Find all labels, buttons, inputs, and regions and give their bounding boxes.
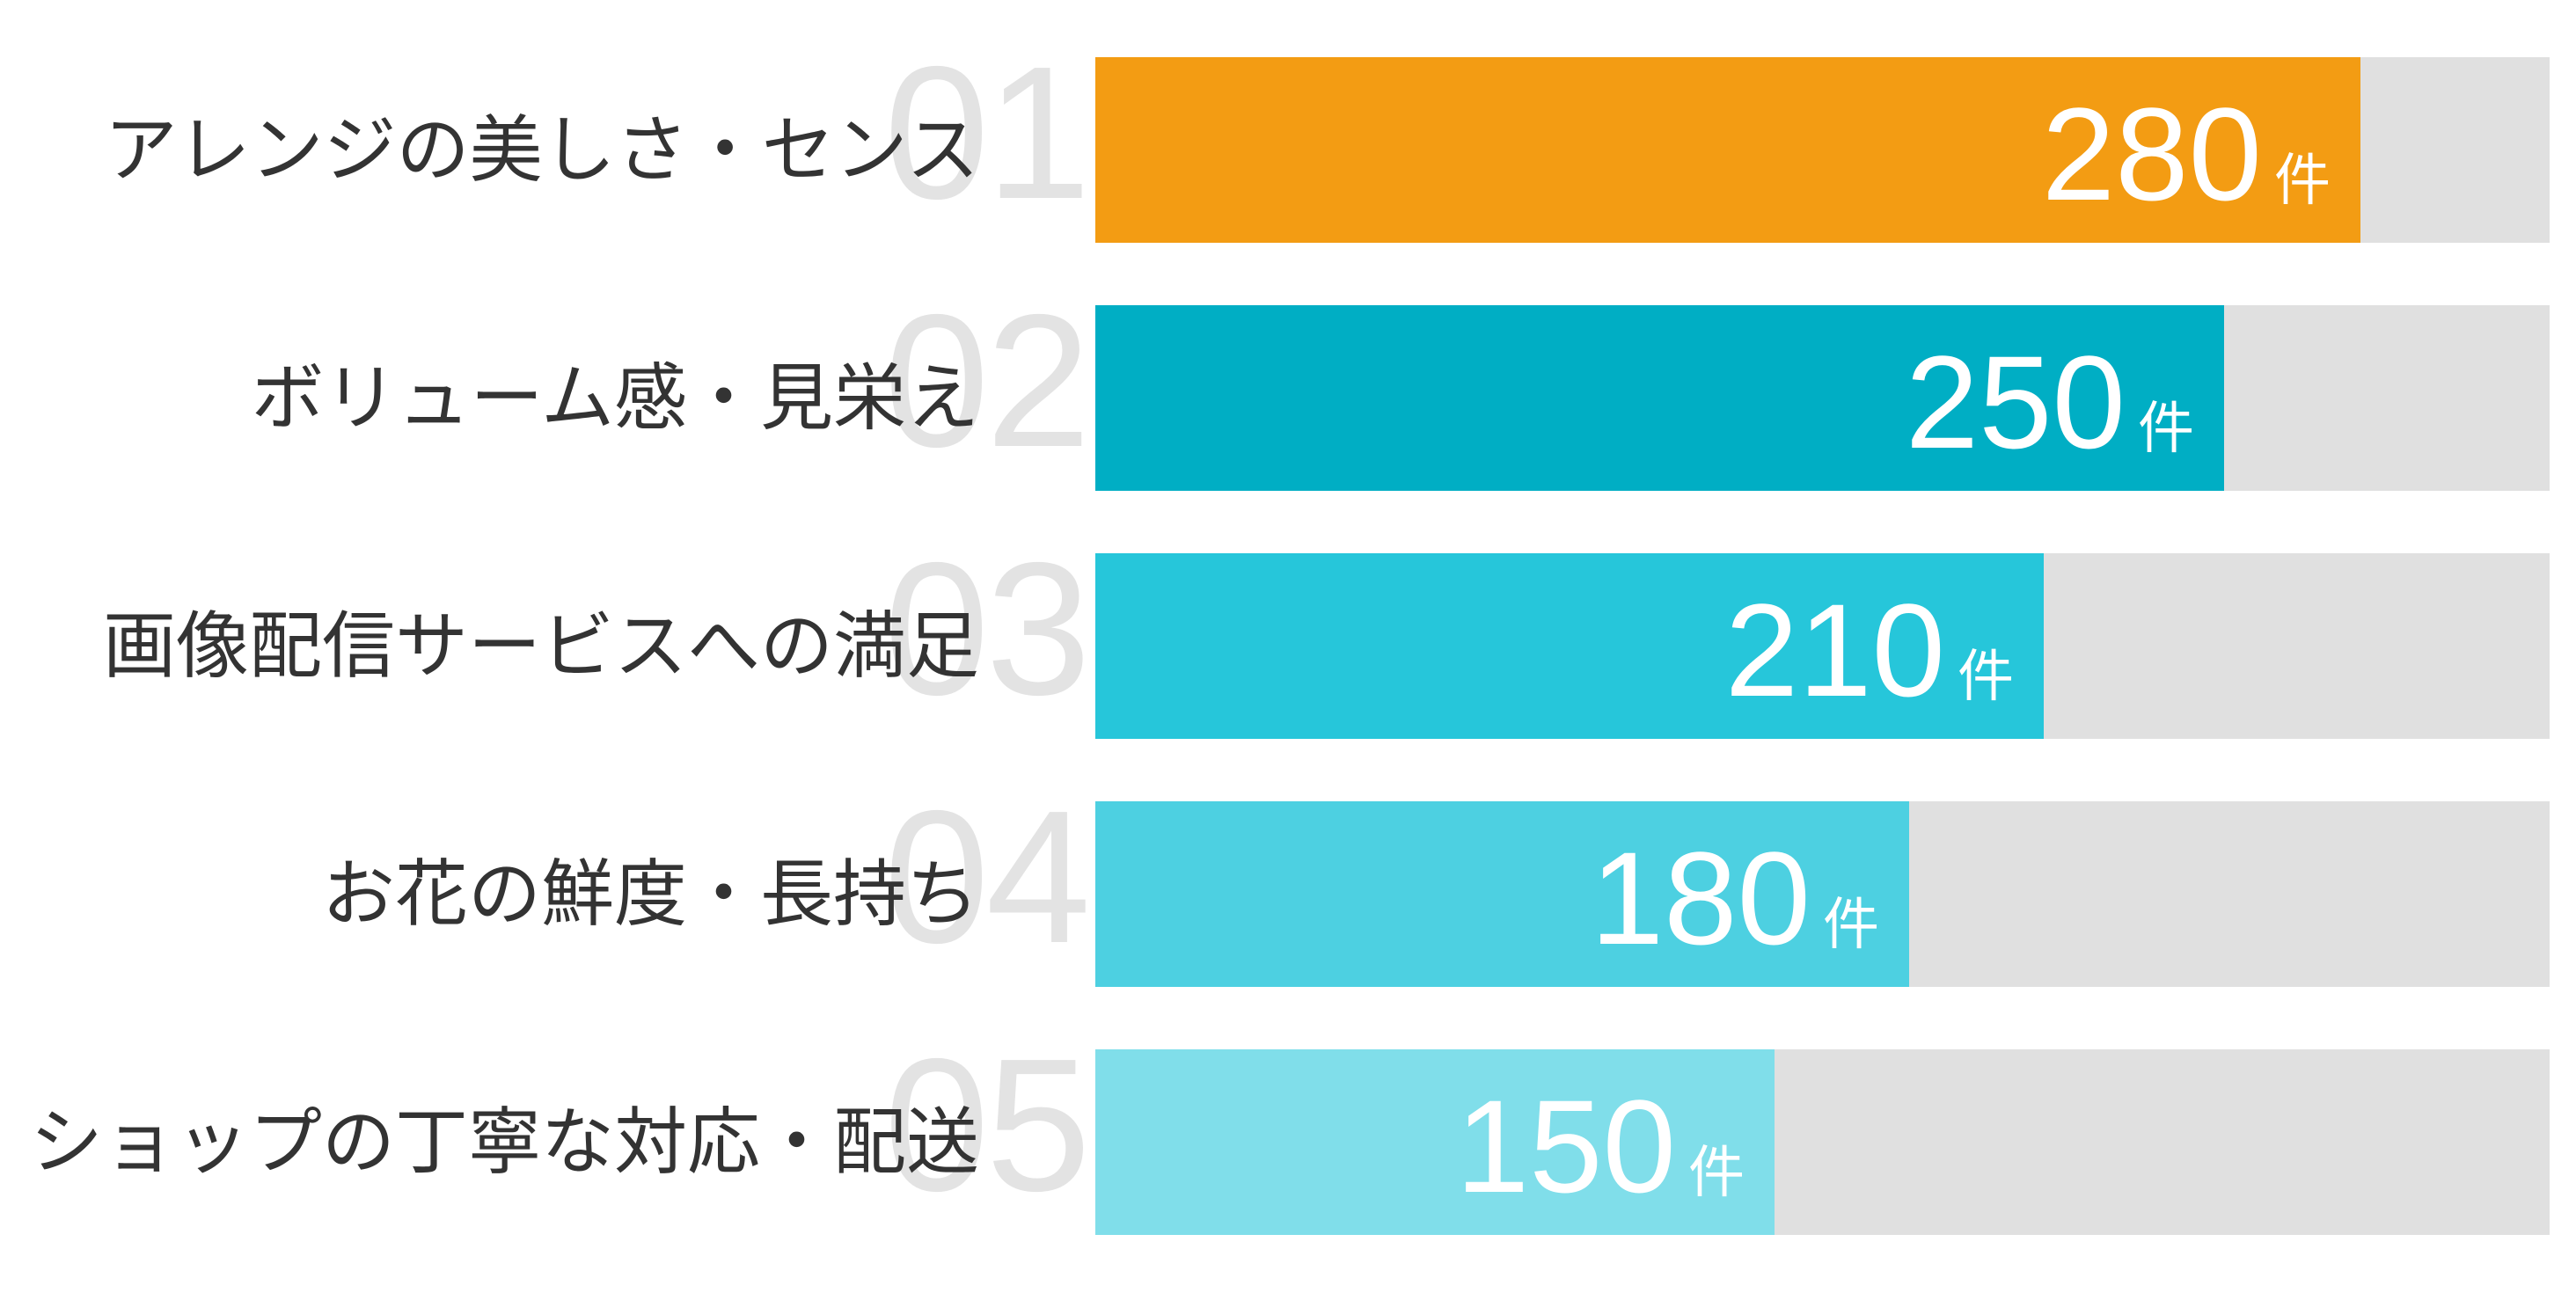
- bar 3: [1095, 553, 2550, 739]
- rank number 02: 02: [884, 274, 1087, 486]
- rank number 04: 04: [884, 771, 1087, 983]
- bar 1: 280件: [2042, 80, 2331, 228]
- bar 2: [1095, 305, 2550, 491]
- row 2: [251, 274, 2550, 491]
- row 5: [30, 1019, 2550, 1235]
- label 5: ショップの丁寧な対応・配送: [30, 1101, 979, 1183]
- bar 4: 180件: [1591, 824, 1879, 972]
- bar 3: 210件: [1725, 576, 2014, 724]
- rank number 05: 05: [884, 1019, 1087, 1231]
- row 4: [322, 771, 2550, 987]
- row 1: [105, 26, 2550, 243]
- bar 5: [1095, 1049, 2550, 1235]
- row 3: [103, 522, 2550, 739]
- bar 5: 150件: [1456, 1072, 1745, 1220]
- label 2: ボリューム感・見栄え: [251, 357, 979, 439]
- bar 4: [1095, 801, 2550, 987]
- bar 2: 250件: [1906, 328, 2194, 476]
- rank number 01: 01: [884, 26, 1087, 238]
- label 3: 画像配信サービスへの満足: [103, 605, 979, 687]
- label 1: アレンジの美しさ・センス: [105, 109, 979, 191]
- rank number 03: 03: [884, 522, 1087, 734]
- bar 1: [1095, 57, 2550, 243]
- label 4: お花の鮮度・長持ち: [322, 853, 979, 935]
